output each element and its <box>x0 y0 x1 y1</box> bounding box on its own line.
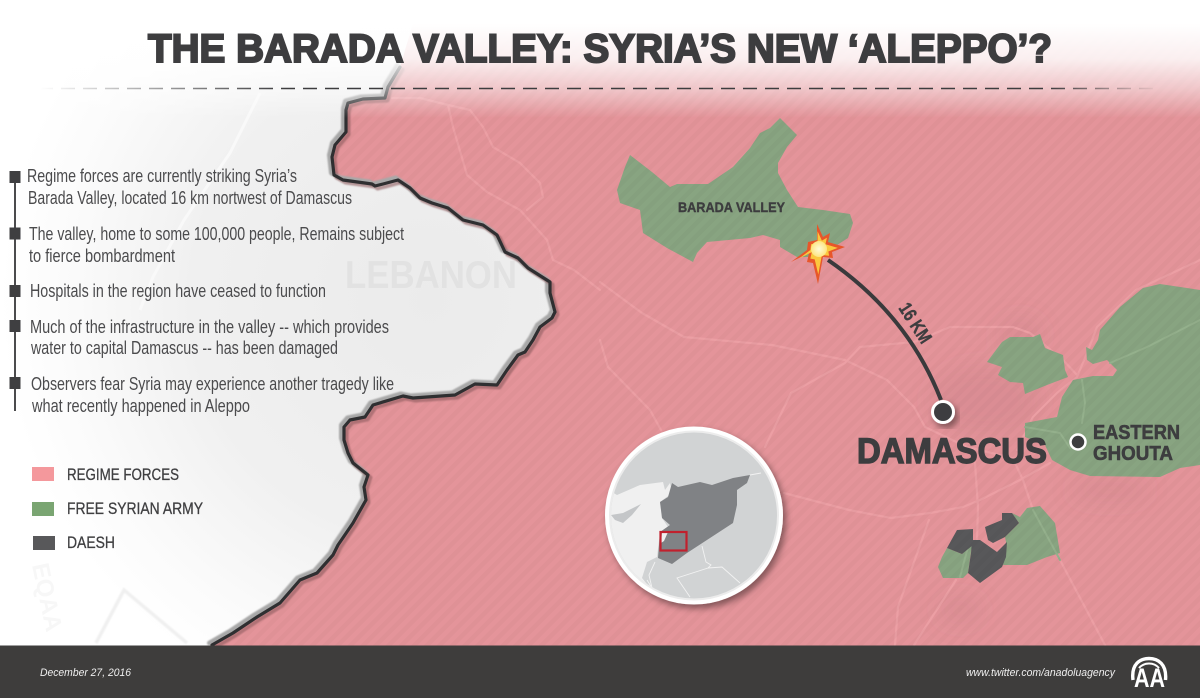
inset: sea <box>611 482 671 583</box>
area: Barada Valley <box>617 118 853 262</box>
legend <box>32 465 203 552</box>
area: south-west pocket <box>938 545 972 578</box>
lighter roads crossing rebel areas <box>960 320 1200 577</box>
text: bullet 1 <box>27 165 352 208</box>
dashed rule <box>39 88 1160 90</box>
inset: Lebanon highlight <box>662 533 668 542</box>
legend: FREE SYRIAN ARMY <box>67 499 203 518</box>
faint map features on Lebanon side <box>26 93 260 643</box>
inset: Cyprus <box>611 504 641 523</box>
text: bullet 4 <box>30 316 389 358</box>
icon: explosion <box>791 224 845 284</box>
inset locator map <box>600 429 780 610</box>
inset: Syria <box>658 475 750 564</box>
border with Lebanon <box>210 65 558 648</box>
text: bullet 2: to fierce bombardment <box>29 245 175 266</box>
text: bullet 5: Observers fear Syria may experience another tragedy like <box>31 373 394 394</box>
legend: DAESH <box>67 533 115 552</box>
marker: Eastern Ghouta <box>1070 434 1086 450</box>
text: bullet 4: water to capital Damascus -- has been damaged <box>30 337 338 358</box>
text: bullet 4: Much of the infrastructure in the valley -- which provides <box>30 316 389 337</box>
logo: Anadolu Agency: AA <box>1134 663 1165 693</box>
label: Damascus: DAMASCUS <box>857 432 1047 471</box>
bullet markers <box>10 171 20 389</box>
title: THE BARADA VALLEY: SYRIA’S NEW ‘ALEPPO’? <box>148 27 1052 71</box>
inset: red locator box <box>660 532 686 550</box>
Free Syrian Army areas <box>617 118 1200 578</box>
text: bullet 1: Regime forces are currently striking Syria’s <box>27 165 297 186</box>
footer bar <box>0 646 1200 698</box>
road network <box>392 98 1200 645</box>
text: bullet 3: Hospitals in the region have ceased to function <box>30 280 326 301</box>
area: Eastern Ghouta <box>1025 284 1200 477</box>
timeline rail <box>14 172 16 411</box>
label: Eastern Ghouta <box>1093 422 1180 465</box>
text: bullet 5 <box>31 373 394 416</box>
label: Barada Valley: BARADA VALLEY <box>678 199 786 215</box>
text: bullet 2: The valley, home to some 100,000 people, Remains subject <box>29 223 404 244</box>
legend: REGIME FORCES <box>67 465 179 484</box>
terrain shading around Damascus <box>930 317 1150 624</box>
label: Lebanon: LEBANON <box>345 254 517 297</box>
marker: Damascus <box>932 402 954 422</box>
footer date: December 27, 2016 <box>40 667 132 679</box>
label: Eastern Ghouta: GHOUTA <box>1093 443 1173 465</box>
arc: 16 km distance <box>828 260 941 400</box>
inset: neighbouring borders <box>647 473 761 597</box>
area: south-east pocket <box>1003 506 1060 565</box>
area: north of Damascus <box>987 334 1068 394</box>
top white fade <box>0 0 1200 118</box>
footer url: www.twitter.com/anadoluagency <box>966 667 1116 679</box>
faint map features on Lebanon side: EQAA <box>26 561 67 634</box>
bullet list <box>10 165 404 416</box>
text: bullet 1: Barada Valley, located 16 km nortwest of Damascus <box>28 187 352 208</box>
text: bullet 2 <box>29 223 404 266</box>
regime forces territory <box>207 0 1200 648</box>
text: bullet 5: what recently happened in Aleppo <box>31 395 250 416</box>
Daesh areas <box>947 513 1019 583</box>
label: Eastern Ghouta: EASTERN <box>1093 422 1180 444</box>
label: 16 km: 16 KM <box>894 299 935 348</box>
